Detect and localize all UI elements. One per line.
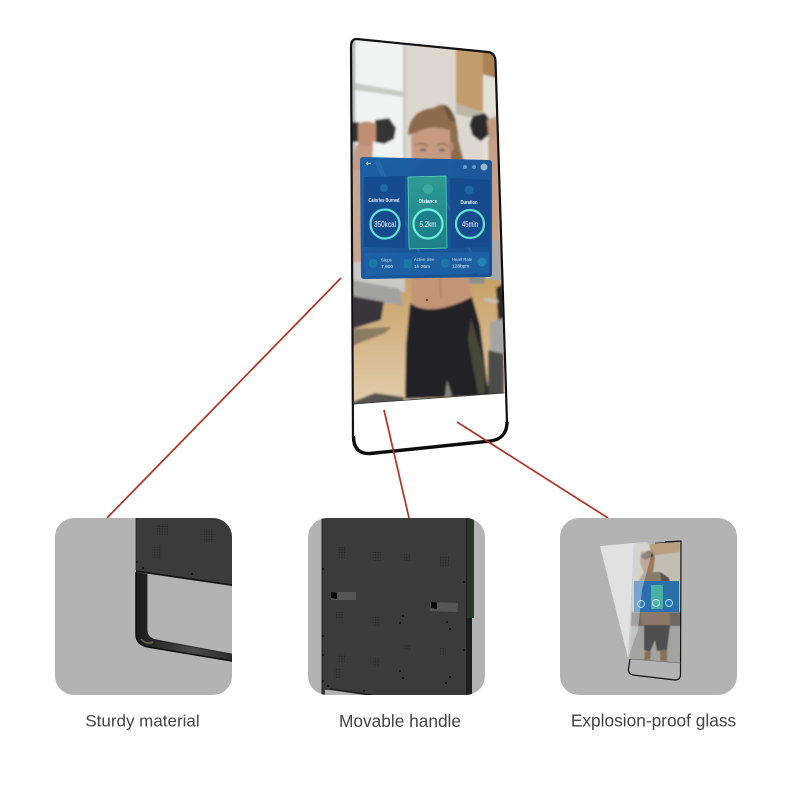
bottom stats strip: Heart Rate [452,257,473,262]
window [354,40,404,158]
line to explosion-proof glass [457,422,608,518]
dumbbell right [470,113,490,141]
mirror metal frame [351,39,507,454]
fitness dashboard overlay [360,157,492,279]
bottom stats strip: 1h 25m [414,264,430,270]
handle slots [331,592,458,612]
wood wall [456,46,483,112]
card: distance highlighted: Distance [419,199,437,205]
pants [405,297,489,399]
back plate [136,518,232,584]
line to sturdy material [107,278,341,518]
glass sheet [600,542,647,658]
card: calories burned: 350kcal [374,220,396,229]
caption: sturdy material: Sturdy material [85,712,200,730]
panel: explosion-proof glass [560,518,737,695]
card: duration: 45min [462,220,478,229]
line to movable handle [384,410,409,518]
bottom stats strip: Steps [381,258,392,262]
card: calories burned [364,176,405,248]
panel: sturdy material [55,518,232,695]
screws [322,568,465,692]
mini man body [638,572,670,625]
dumbbell left [350,122,359,142]
header icons [463,164,488,170]
mirror product [345,35,510,454]
callout lines [107,278,608,518]
back arrow icon [366,162,371,165]
mirror reflection: gym scene with woman [345,35,510,408]
bottom stats strip: Active time [414,257,435,262]
caption: movable handle: Movable handle [339,711,461,731]
mini dashboard [634,581,679,612]
bottom stats strip [364,252,489,276]
speaker holes [136,524,214,575]
bottom stats strip: 7,800 [381,264,393,270]
speaker holes [334,547,449,678]
caption: explosion-proof glass: Explosion-proof glass [571,710,736,730]
panel: movable handle [308,518,485,697]
bottom stats strip: 128bpm [452,264,469,270]
card: calories burned: Calories Burned [368,198,400,204]
mini mirror [628,541,682,680]
arms [352,143,373,170]
mini frame [628,541,681,680]
card: duration: Duration [460,200,478,206]
head and hair [406,104,465,160]
back plate [322,518,466,695]
torso [411,277,472,310]
card: duration [450,178,490,248]
card: distance highlighted [408,176,447,249]
frame tube [136,572,232,661]
card: distance highlighted: 5.2km [420,220,437,229]
lower frame [325,690,364,695]
floor [354,277,504,404]
